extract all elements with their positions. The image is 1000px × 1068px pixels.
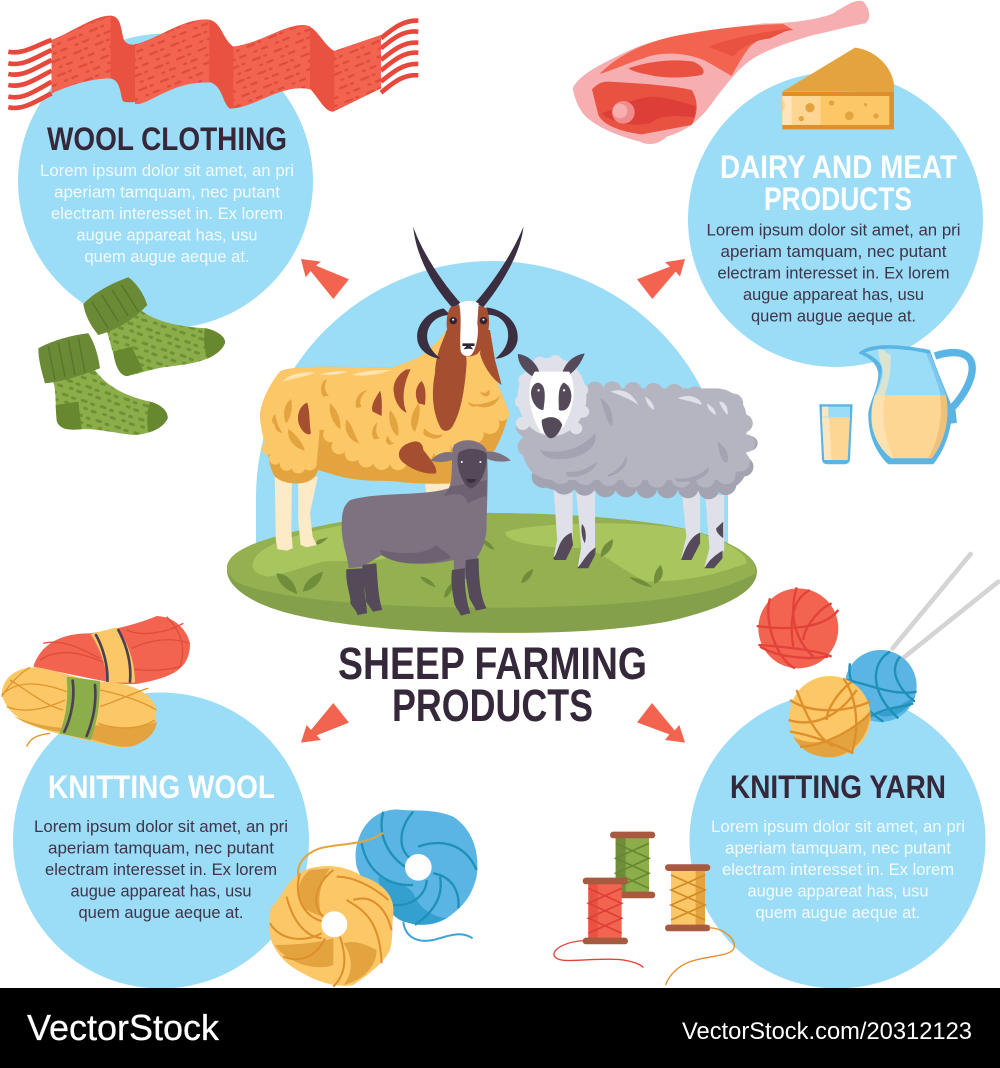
arrow: to dairy and meat [637,259,685,299]
red spool [554,878,643,968]
text block: wool clothing: electram interesset in. Ex lorem [51,205,283,223]
face [529,372,574,433]
illustration: green socks [38,277,225,435]
illustration: yarn balls and needles [554,554,998,985]
text block: dairy and meat products: electram interesset in. Ex lorem [718,264,950,282]
grey lamb [342,440,511,616]
footer bar: stock attribution [0,988,1000,1068]
blue yarn ball [845,650,917,722]
illustration: ham leg [573,1,869,144]
text block: dairy and meat products [706,149,960,326]
fleece shade [532,433,758,499]
panel circle: dairy and meat products [688,72,983,367]
lamb shade [380,480,487,564]
text block: wool clothing: Lorem ipsum dolor sit amet, an pri [40,162,294,180]
panel circle: wool clothing [18,34,313,328]
illustration: wool skeins [2,616,190,747]
yellow yarn ball [789,676,871,757]
front sock [38,333,168,435]
text block: dairy and meat products: quem augue aeque at. [751,308,916,326]
red yarn ball [757,587,838,668]
meadow [227,513,757,633]
title: sheep farming products [338,638,647,731]
text block: knitting wool [34,769,288,922]
arrow: to knitting yarn [637,703,685,743]
text block: knitting wool: augue appareat has, usu [70,882,252,900]
title: sheep farming products: PRODUCTS [392,680,593,731]
text block: dairy and meat products: PRODUCTS [764,181,912,217]
panel circle: knitting wool [13,692,309,988]
ears [518,353,585,377]
back sock [83,277,225,376]
knitted panels [52,17,381,110]
fleece body [516,381,756,488]
illustration: wool rolls [269,809,477,987]
yellow sheep [260,227,523,551]
illustration: red knitted scarf [8,16,418,112]
jug handle [935,353,972,423]
yellow spool [665,864,734,985]
green spool [610,832,655,898]
text block: wool clothing: aperiam tamquam, nec putant [54,184,280,202]
text block: knitting yarn: augue appareat has, usu [748,882,928,900]
lamb ears [431,451,511,462]
jug body [858,345,953,464]
text block: knitting wool: electram interesset in. Ex lorem [45,861,277,879]
illustration: milk jug and glass [819,345,972,464]
text block: dairy and meat products: augue appareat has, usu [743,286,924,304]
text block: dairy and meat products: DAIRY AND MEAT [720,149,957,185]
blue wool roll [356,809,477,941]
text block: wool clothing: augue appareat has, usu [76,226,258,244]
lamb legs [346,558,487,616]
text block: knitting wool: KNITTING WOOL [48,769,275,805]
illustration: cheese wedge [782,48,894,129]
text block: knitting yarn: aperiam tamquam, nec putant [725,840,951,858]
text block: dairy and meat products: aperiam tamquam, nec putant [720,243,947,261]
footer bar: stock attribution: VectorStock [27,1007,220,1048]
title: sheep farming products: SHEEP FARMING [338,638,647,689]
text block: knitting wool: aperiam tamquam, nec putant [48,840,274,858]
wool curls [540,398,728,482]
arrows [301,259,685,743]
text block: dairy and meat products: Lorem ipsum dolor sit amet, an pri [706,222,960,240]
yellow sheep head and horns [413,227,523,359]
text block: wool clothing: quem augue aeque at. [84,248,250,266]
text block: wool clothing [40,121,294,266]
text block: knitting wool: Lorem ipsum dolor sit amet, an pri [34,818,288,836]
glass [819,404,853,464]
hooves [553,522,723,568]
text block: knitting yarn: electram interesset in. Ex lorem [722,861,954,879]
fringes [8,21,418,108]
red skein [33,616,190,684]
scarf body [52,16,381,112]
yellow skein [2,667,157,747]
text block: knitting yarn: KNITTING YARN [730,769,946,805]
knitting needles [893,554,998,657]
panel circle: knitting yarn [690,692,986,988]
yellow wool roll [269,833,393,987]
footer bar: stock attribution: VectorStock.com/20312123 [682,1018,972,1045]
text block: knitting wool: quem augue aeque at. [78,904,244,922]
arrow: to wool clothing [301,259,349,299]
text block: knitting yarn: Lorem ipsum dolor sit amet, an pri [711,818,965,836]
central sky dome [256,261,728,560]
grey sheep [515,353,758,568]
text block: knitting yarn: quem augue aeque at. [756,904,920,922]
head wool [515,355,589,436]
lamb face [457,449,487,489]
arrow: to knitting wool [301,703,349,743]
text block: knitting yarn [711,769,965,922]
legs [554,490,724,568]
text block: wool clothing: WOOL CLOTHING [47,121,287,157]
yellow sheep fleece [260,330,509,484]
yellow sheep legs [275,477,452,551]
lamb body [342,440,488,580]
